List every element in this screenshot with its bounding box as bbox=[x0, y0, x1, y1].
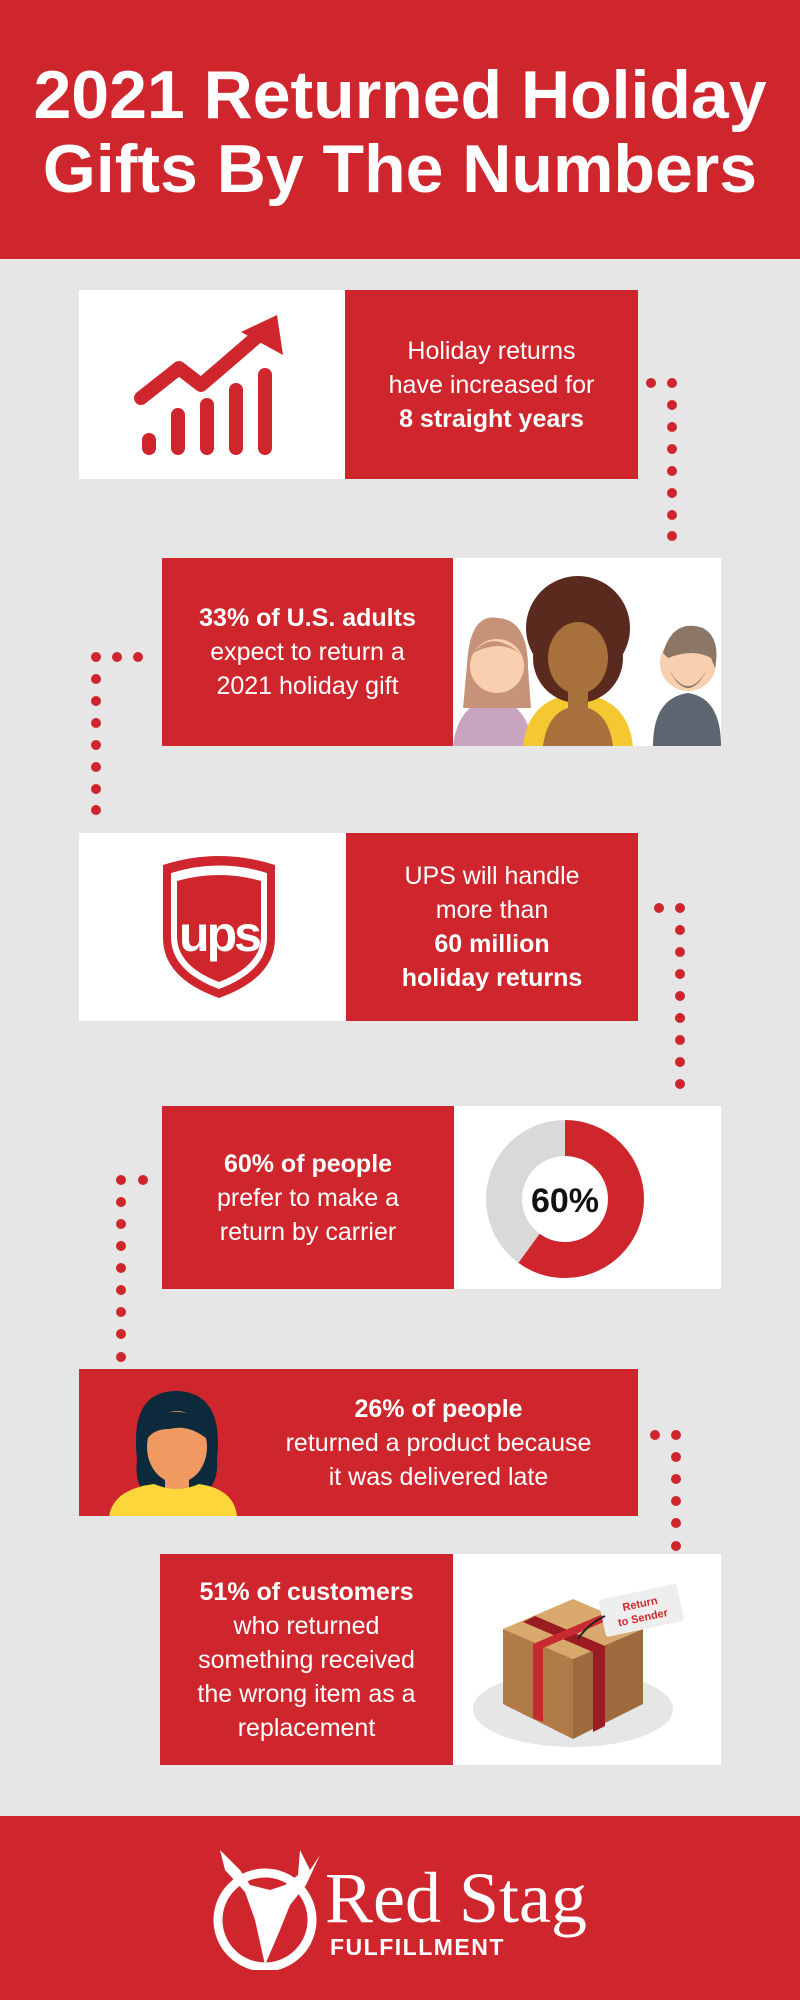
text: 26%: returned a product because bbox=[286, 1428, 591, 1456]
text: FULFILLMENT: FULFILLMENT bbox=[330, 1934, 505, 1960]
text: 60 million bbox=[346, 833, 638, 1021]
icon: stag bbox=[214, 1850, 320, 1970]
panel: 26% late delivery bbox=[79, 1369, 638, 1516]
text: 60 million: 60 million bbox=[434, 930, 550, 958]
text: 8 straight years bbox=[345, 290, 638, 479]
text: 60% of people bbox=[162, 1106, 454, 1289]
text: 26%: it was delivered late bbox=[329, 1462, 548, 1490]
text: 60 million: UPS will handle bbox=[404, 862, 580, 890]
icon: UPS shield: ups bbox=[179, 906, 260, 962]
panel: UPS bbox=[79, 833, 638, 1021]
text: 26% bbox=[286, 1394, 591, 1490]
text: 60% of people: return by carrier bbox=[220, 1218, 396, 1246]
title: 2021 Returned Holiday bbox=[33, 57, 767, 133]
text: 60 million: more than bbox=[436, 896, 548, 924]
text: 8 straight years: have increased for bbox=[389, 370, 594, 398]
footer bbox=[0, 1816, 800, 2000]
text: 8 straight years: Holiday returns bbox=[407, 336, 576, 364]
text: 8 straight years: 8 straight years bbox=[399, 404, 584, 432]
text: 33%: 2021 holiday gift bbox=[216, 672, 399, 700]
text: 33%: 33% of U.S. adults bbox=[199, 604, 416, 632]
text: 33%: expect to return a bbox=[210, 638, 405, 666]
panel: 33% of adults bbox=[162, 558, 721, 746]
text: 51% bbox=[160, 1554, 453, 1765]
text: Red Stag: Red Stag bbox=[325, 1858, 587, 1938]
title bbox=[33, 57, 767, 207]
donut chart bbox=[454, 1106, 721, 1289]
panel: returns increased bbox=[79, 290, 638, 479]
title: Gifts By The Numbers bbox=[43, 131, 757, 207]
icon: return box bbox=[453, 1554, 721, 1765]
icon: UPS shield bbox=[79, 833, 346, 1021]
donut chart: 60% bbox=[531, 1182, 599, 1220]
text: 60 million: holiday returns bbox=[402, 964, 582, 992]
icon: return box: Return bbox=[622, 1595, 659, 1614]
text: 51%: the wrong item as a bbox=[197, 1680, 416, 1708]
icon: growth chart bbox=[79, 290, 345, 479]
header bbox=[0, 0, 800, 259]
text: 26%: 26% of people bbox=[354, 1394, 523, 1422]
text: 60% of people: 60% of people bbox=[224, 1150, 392, 1178]
logo: Red Stag bbox=[214, 1850, 587, 1970]
text: 33% bbox=[162, 558, 453, 746]
text: 60% of people: prefer to make a bbox=[217, 1184, 399, 1212]
icon: woman bbox=[109, 1391, 237, 1516]
text: 51%: replacement bbox=[238, 1714, 375, 1742]
text: 51%: who returned bbox=[234, 1612, 379, 1640]
text: 51%: 51% of customers bbox=[200, 1578, 413, 1606]
panel: 51% wrong item bbox=[160, 1554, 721, 1765]
panel: 60% by carrier bbox=[162, 1106, 721, 1289]
text: 51%: something received bbox=[198, 1646, 415, 1674]
icon: return box: to Sender bbox=[617, 1607, 670, 1629]
icon: three people bbox=[453, 558, 721, 746]
